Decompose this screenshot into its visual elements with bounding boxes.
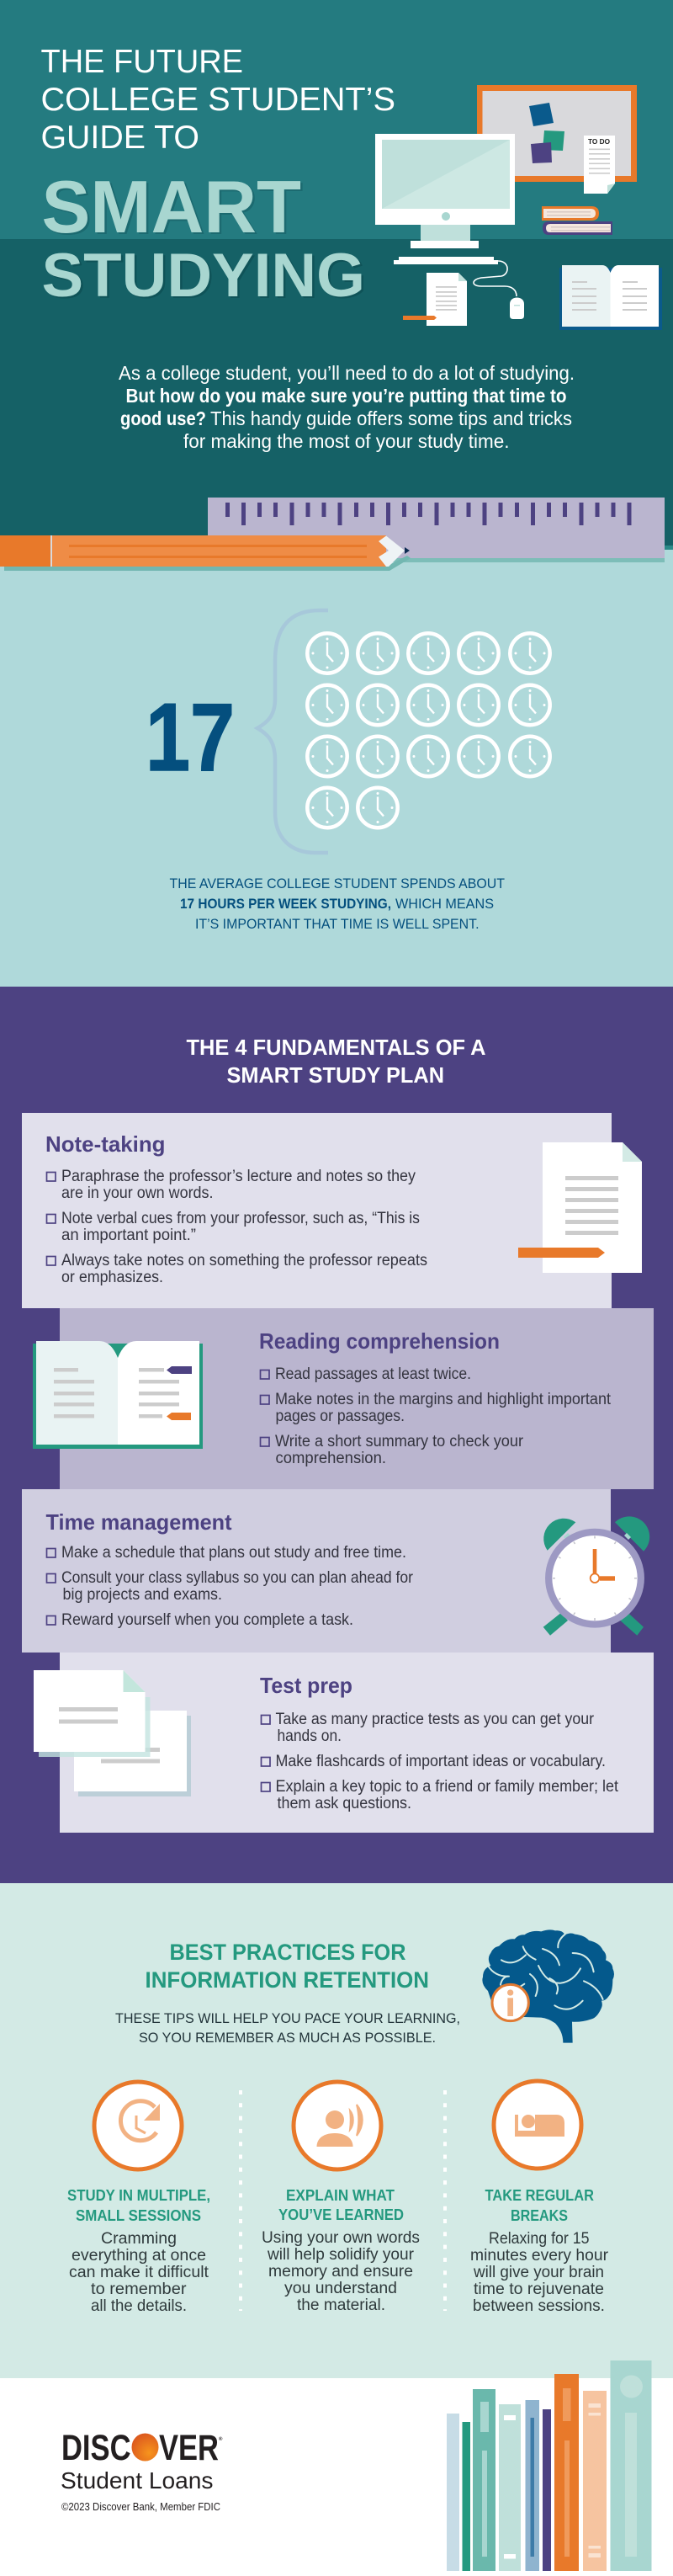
icon: clock with arrow [94,2082,182,2169]
background: best practices section [0,1883,673,2378]
footer logo: Discover Student Loans: ©2023 Discover Bank, Member FDIC [61,2500,220,2513]
column: study in multiple sessions: everything at once [72,2247,206,2265]
title: THE FUTURE [40,44,243,80]
stat description [170,876,505,932]
column: study in multiple sessions: all the details. [91,2297,187,2315]
background: statistic section [0,550,673,987]
panel: test prep: them ask questions. [278,1795,411,1812]
column: explain what you've learned: EXPLAIN WHAT [286,2187,395,2204]
panel: test prep: Take as many practice tests as you can get your [276,1711,595,1728]
intro text: This handy guide offers some tips and tricks [210,407,572,429]
panel: reading comprehension: comprehension. [276,1450,386,1467]
icon: row of books [447,2360,651,2571]
icon: open book with tabs [33,1341,203,1449]
icon: brain with info symbol [482,1929,614,2043]
icon: note page with pencil [403,273,467,326]
column: take regular breaks: Relaxing for 15 [489,2230,589,2248]
title: STUDYING [42,242,365,310]
column: take regular breaks: BREAKS [511,2207,568,2224]
panel: time management: Consult your class syllabus so you can plan ahead for [61,1569,414,1587]
bracket [257,610,328,853]
panel: time management: big projects and exams. [62,1586,222,1604]
footer logo: Discover Student Loans: DISC [61,2428,131,2468]
panel: reading comprehension: Write a short summary to check your [275,1433,524,1450]
column: take regular breaks: between sessions. [473,2297,605,2315]
icon: open book [559,265,662,330]
panel: note-taking: Note verbal cues from your professor, such as, “This is [61,1210,420,1227]
column: study in multiple sessions: STUDY IN MULTIPLE, [67,2187,210,2204]
column: explain what you've learned: Using your own words [262,2229,420,2247]
footer logo: Discover Student Loans: VER [159,2428,219,2468]
column: explain what you've learned: memory and ensure [268,2263,413,2281]
title [40,44,395,311]
heading: best practices [145,1940,429,1993]
column: study in multiple sessions: Cramming [101,2230,177,2248]
heading: fundamentals: SMART STUDY PLAN [227,1062,444,1088]
stat description: IT’S IMPORTANT THAT TIME IS WELL SPENT. [195,916,480,932]
title: STUDYING [44,243,367,311]
background: footer [0,2378,673,2576]
column: take regular breaks [470,2081,609,2315]
intro text: good use? [120,407,206,429]
panel: time management [22,1489,611,1653]
column: explain what you've learned: you understand [284,2280,397,2297]
panel: test prep: Test prep [260,1673,352,1698]
heading: fundamentals [187,1035,486,1088]
panel: note-taking: Paraphrase the professor’s lecture and notes so they [61,1168,416,1185]
column: explain what you've learned: YOU’VE LEARNED [278,2206,404,2223]
intro text [119,362,575,452]
dotted dividers [241,2090,445,2311]
footer logo: Discover Student Loans: Student Loans [61,2467,213,2494]
footer logo: Discover Student Loans: O [132,2428,158,2468]
icon: stacked books [542,206,612,235]
intro text: But how do you make sure you’re putting that time to [126,385,567,407]
icon: desktop computer [375,134,524,319]
panel: note-taking: Always take notes on something the professor repeats [61,1252,427,1269]
title: SMART [42,165,301,248]
intro text: for making the most of your study time. [183,430,510,452]
column: explain what you've learned: will help solidify your [267,2246,415,2264]
column: take regular breaks: TAKE REGULAR [485,2187,594,2204]
icon: flashcards [34,1670,191,1796]
panel: time management: Make a schedule that plans out study and free time. [61,1544,406,1562]
stat description: 17 HOURS PER WEEK STUDYING, [180,896,391,912]
panel: note-taking: Note-taking [45,1131,165,1157]
panel: test prep [60,1653,654,1833]
column: study in multiple sessions [67,2082,210,2315]
panel: reading comprehension [60,1308,654,1489]
panel: note-taking: or emphasizes. [61,1269,163,1286]
icon: bulletin board [477,85,637,194]
icon: pencil [0,535,411,571]
panel: test prep: Explain a key topic to a friend or family member; let [276,1778,619,1796]
icon: bed [494,2081,581,2169]
panel: reading comprehension: Read passages at least twice. [275,1365,471,1383]
best practices subheading [115,2010,460,2046]
panel: note-taking [22,1113,612,1308]
background: header teal [0,0,673,239]
intro text: As a college student, you’ll need to do a lot of studying. [119,362,575,384]
panel: time management: Time management [45,1509,232,1535]
footer logo: Discover Student Loans: ® [219,2436,223,2442]
icon: document with pencil [518,1142,642,1273]
heading: best practices: INFORMATION RETENTION [145,1967,429,1993]
footer logo: Discover Student Loans [61,2428,223,2513]
panel: note-taking: an important point.” [61,1227,196,1244]
panel: test prep: Make flashcards of important ideas or vocabulary. [276,1753,606,1770]
best practices subheading: THESE TIPS WILL HELP YOU PACE YOUR LEARNING, [115,2010,460,2026]
panel: reading comprehension: Make notes in the margins and highlight important [275,1391,612,1408]
panel: reading comprehension: pages or passages. [276,1408,405,1425]
clocks pictogram: 17 hours [307,633,550,828]
column: explain what you've learned [262,2082,420,2314]
stat description: WHICH MEANS [395,896,494,912]
best practices subheading: SO YOU REMEMBER AS MUCH AS POSSIBLE. [139,2030,436,2046]
column: study in multiple sessions: can make it difficult [69,2264,209,2281]
column: study in multiple sessions: to remember [91,2281,187,2298]
icon: alarm clock [543,1516,649,1636]
panel: note-taking: are in your own words. [61,1184,214,1202]
column: take regular breaks: will give your brain [473,2264,604,2281]
title: SMART [44,167,303,250]
heading: fundamentals: THE 4 FUNDAMENTALS OF A [187,1035,486,1060]
background: fundamentals section [0,987,673,1883]
column: explain what you've learned: the material. [297,2297,385,2314]
stat: 17: 17 [146,684,235,791]
heading: best practices: BEST PRACTICES FOR [170,1940,405,1965]
panel: time management: Reward yourself when you complete a task. [61,1611,353,1629]
title: COLLEGE STUDENT’S [40,82,395,118]
panel: reading comprehension: Reading comprehension [259,1328,500,1354]
icon: bulletin board: TO DO [588,138,610,146]
background: header dark teal [0,239,673,550]
column: take regular breaks: minutes every hour [470,2247,609,2265]
stat description: THE AVERAGE COLLEGE STUDENT SPENDS ABOUT [170,876,505,891]
column: study in multiple sessions: SMALL SESSIONS [76,2207,201,2224]
panel: test prep: hands on. [278,1727,342,1745]
icon: ruler [208,498,673,562]
column: take regular breaks: time to rejuvenate [474,2281,604,2298]
title: GUIDE TO [40,120,199,156]
icon: person speaking [294,2082,381,2169]
